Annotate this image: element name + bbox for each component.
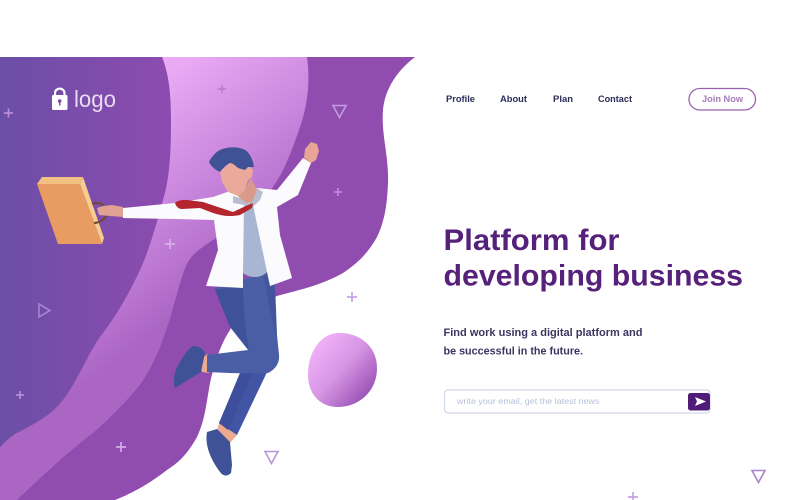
red tie [175, 200, 253, 216]
face [220, 163, 253, 196]
collar [233, 188, 263, 207]
heading [444, 224, 743, 292]
email input [444, 390, 710, 413]
back hand [97, 205, 123, 217]
lower shoe [206, 429, 232, 476]
neck [236, 178, 257, 203]
description text: Find work using a digital platform and [444, 327, 642, 339]
description text: be successful in the future. [444, 346, 583, 358]
nav: Plan: Plan [553, 94, 573, 104]
decorative plus signs [4, 85, 638, 500]
decorative triangles [39, 106, 765, 482]
icon: padlock [52, 89, 68, 110]
raised fist [304, 142, 319, 163]
description text [444, 327, 642, 358]
heading: developing business [444, 260, 743, 292]
dark left wave [0, 57, 171, 447]
t-shirt [243, 205, 267, 277]
email input: write your email, get the latest news [456, 397, 600, 406]
send button [688, 393, 710, 410]
hair [209, 147, 254, 172]
join now button: Join Now [702, 94, 744, 104]
trousers seam shade [264, 275, 277, 340]
navigation [446, 94, 632, 104]
nav: Contact: Contact [598, 94, 632, 104]
trousers thigh shade [215, 285, 249, 349]
logo [52, 86, 116, 112]
floating gradient blob [308, 333, 377, 407]
light flowing band [0, 57, 308, 500]
trousers lower leg [219, 368, 269, 435]
trousers shin shade [219, 370, 254, 430]
ankles [199, 354, 237, 443]
join now button [689, 88, 756, 110]
heading: Platform for [444, 224, 620, 257]
trousers upper leg [207, 272, 279, 373]
illustration: jumping businessman [37, 142, 319, 476]
background panel: purple wave [0, 57, 415, 500]
nav: Profile: Profile [446, 94, 475, 104]
logo wordmark: logo [74, 86, 116, 112]
nav: About: About [500, 94, 527, 104]
briefcase [37, 177, 107, 244]
white shirt [123, 158, 311, 288]
upper shoe [174, 346, 205, 388]
